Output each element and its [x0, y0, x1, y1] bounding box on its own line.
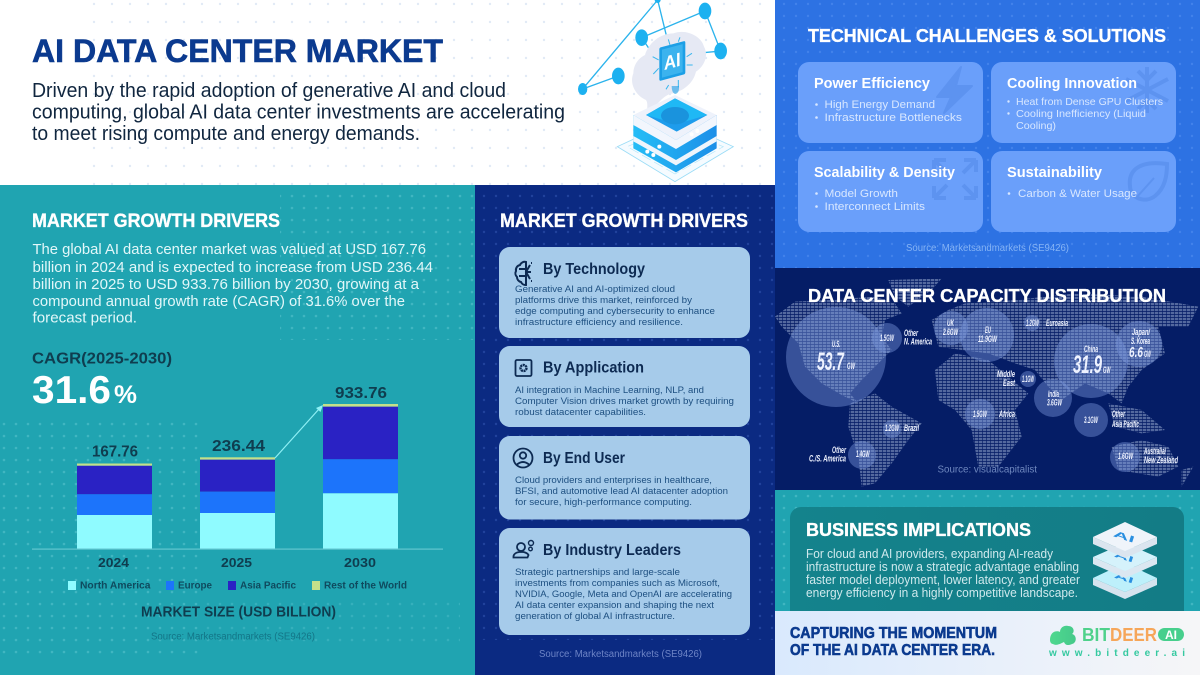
heading: DATA CENTER CAPACITY DISTRIBUTION: [808, 285, 1166, 306]
map labels: 53.7: [817, 348, 845, 376]
card: sustainability: [991, 151, 1176, 232]
card: scalability and density: Model Growth: [824, 188, 898, 200]
world dot map: [775, 278, 1198, 487]
cloud: [632, 32, 706, 113]
icon: bolt: [937, 67, 972, 113]
source: Source: visualcapitalist: [938, 464, 1037, 476]
card: by industry leaders: investments from companies such as Microsoft,: [515, 578, 720, 589]
stacked bar chart: [32, 385, 443, 570]
map labels: GW: [1144, 349, 1151, 359]
server: [633, 115, 717, 172]
arrow: [275, 405, 323, 458]
source: Source: Marketsandmarkets (SE9426): [906, 243, 1069, 254]
bar 2030: [323, 385, 398, 570]
legend: [68, 580, 407, 592]
closing statement: CAPTURING THE MOMENTUM: [790, 625, 997, 642]
description: [32, 242, 433, 326]
card: by application: robust datacenter capabilities.: [515, 407, 646, 418]
map labels: 6.6: [1129, 344, 1143, 361]
map labels: C./S. America: [809, 454, 846, 464]
card: by industry leaders: generation of global AI infrastructure.: [515, 611, 675, 622]
closing statement: [790, 625, 997, 659]
icon: AI cloud server illustration: AI: [664, 49, 681, 75]
card: by application: AI integration in Machine Learning, NLP, and: [515, 385, 704, 396]
logo: Bitdeer AI: [1048, 625, 1185, 659]
map labels: 11.9GW: [978, 334, 998, 345]
map labels: Other: [1112, 409, 1125, 419]
card: cooling innovation: Cooling Innovation: [1007, 76, 1137, 92]
card: by industry leaders: By Industry Leaders: [543, 542, 681, 559]
CAGR callout: %: [114, 381, 137, 409]
legend: North America: [80, 580, 151, 592]
axis title: MARKET SIZE (USD BILLION): [141, 604, 336, 620]
card: cooling innovation: Heat from Dense GPU Clusters: [1016, 97, 1163, 108]
bottom chip: AI: [1113, 571, 1135, 586]
icon: leader with gears: [514, 540, 534, 558]
map labels: GW: [1103, 365, 1111, 375]
bar 2025: 236.44: [212, 438, 265, 455]
map labels: China: [1084, 344, 1098, 354]
title: AI DATA CENTER MARKET: [32, 33, 443, 69]
panel: data center capacity map: [775, 268, 1200, 490]
map labels: Asia Pacific: [1111, 419, 1139, 429]
description: forecast period.: [32, 310, 137, 326]
logo: Bitdeer AI: AI: [1165, 630, 1177, 642]
card: by industry leaders: [499, 528, 750, 635]
logo: Bitdeer AI: DEER: [1110, 625, 1157, 645]
map labels: East: [1003, 378, 1016, 388]
inner card: [790, 507, 1184, 611]
map labels: India: [1048, 389, 1059, 399]
map labels: 1.2GW: [885, 423, 899, 433]
card: by application: By Application: [543, 360, 644, 376]
body text: faster model deployment, lower latency, and greater: [806, 573, 1080, 587]
subtitle: computing, global AI data center investments are accelerating: [32, 102, 565, 124]
card: cooling innovation: [991, 62, 1176, 143]
legend: Europe: [178, 580, 212, 592]
bar 2024: 167.76: [92, 444, 138, 460]
closing statement: OF THE AI DATA CENTER ERA.: [790, 642, 995, 659]
body text: infrastructure is now a strategic advantage enabling: [806, 560, 1079, 574]
panel: header: [0, 0, 775, 185]
card: sustainability: Sustainability: [1007, 165, 1102, 181]
card: by end user: Cloud providers and enterprises in healthcare,: [515, 475, 712, 486]
description: billion in 2025 to USD 933.76 billion by 2030, growing at a: [32, 277, 420, 293]
card: by technology: platforms drive this market, reinforced by: [515, 295, 692, 306]
card: by application: Computer Vision drives market growth by requiring: [515, 396, 734, 407]
map labels: 1.5GW: [880, 333, 894, 343]
card: by industry leaders: AI data center expansion and shaping the next: [515, 600, 714, 611]
CAGR callout: 31.6: [32, 369, 111, 412]
bar 2030: 933.76: [335, 385, 387, 402]
icon: user circle: [514, 448, 532, 468]
card: by technology: infrastructure efficiency and resilience.: [515, 317, 683, 328]
panel: market growth drivers teal: [0, 185, 475, 675]
bar 2030: 2030: [344, 556, 376, 570]
source: Source: Marketsandmarkets (SE9426): [539, 649, 702, 660]
card: cooling innovation: Cooling): [1016, 121, 1056, 132]
description: The global AI data center market was valued at USD 167.76: [32, 242, 426, 258]
card: by end user: for secure, high-performance computing.: [515, 497, 692, 508]
CAGR callout: [32, 350, 172, 412]
panel: footer: [775, 611, 1200, 675]
subtitle: Driven by the rapid adoption of generative AI and cloud: [32, 80, 506, 102]
card: by technology: By Technology: [543, 261, 645, 278]
map labels: Other: [832, 445, 846, 455]
card: power efficiency: High Energy Demand: [824, 99, 935, 111]
description: billion in 2024 and is expected to increase from USD 236.44: [32, 260, 433, 276]
map labels: 3.1GW: [1084, 415, 1098, 425]
middle chip: AI: [1113, 550, 1135, 565]
card: power efficiency: [798, 62, 983, 143]
map labels: New Zealand: [1144, 455, 1178, 465]
card: power efficiency: Power Efficiency: [814, 76, 930, 92]
source: Source: Marketsandmarkets (SE9426): [151, 632, 315, 642]
body text: energy efficiency in a highly competitive landscape.: [806, 586, 1078, 600]
card: by end user: By End User: [543, 450, 625, 467]
heading: TECHNICAL CHALLENGES & SOLUTIONS: [808, 25, 1166, 46]
map labels: Australia/: [1143, 446, 1167, 456]
heading: MARKET GROWTH DRIVERS: [32, 210, 280, 232]
logo: Bitdeer AI: BIT: [1082, 625, 1110, 645]
panel: business implications: [775, 490, 1200, 611]
bar 2025: 2025: [221, 556, 252, 570]
map labels: 1.5GW: [973, 409, 987, 419]
card: by technology: [499, 247, 750, 338]
panel: market growth drivers navy: [475, 185, 775, 675]
heading: BUSINESS IMPLICATIONS: [806, 520, 1031, 540]
card: by technology: Generative AI and AI-optimized cloud: [515, 284, 675, 295]
capacity bubbles: [786, 307, 1162, 472]
map labels: UK: [947, 318, 954, 328]
card: power efficiency: Infrastructure Bottlenecks: [824, 112, 963, 124]
map labels: 3.6GW: [1047, 398, 1062, 408]
icon: leaf: [1130, 163, 1167, 200]
legend: Rest of the World: [324, 580, 407, 592]
logo: Bitdeer AI: www.bitdeer.ai: [1048, 648, 1185, 659]
map labels: 1.1GW: [1022, 374, 1034, 384]
map labels: 1.4GW: [856, 449, 870, 459]
map labels: U.S.: [832, 339, 840, 349]
legend: Asia Pacific: [240, 580, 296, 592]
description: compound annual growth rate (CAGR) of 31.6% over the: [32, 294, 405, 310]
card: by technology: edge computing and cybersecurity to enhance: [515, 306, 715, 317]
map labels: EU: [985, 325, 991, 335]
icon: brain chip: [515, 262, 532, 285]
icon: AI cloud server illustration: [578, 0, 733, 182]
icon: expand arrows: [934, 160, 976, 198]
icon: gear in square: [516, 360, 532, 376]
body text: For cloud and AI providers, expanding AI-ready: [806, 547, 1054, 561]
CAGR callout: CAGR(2025-2030): [32, 350, 172, 368]
map labels: Middle: [997, 369, 1015, 379]
map labels: GW: [847, 361, 855, 371]
card: sustainability: Carbon & Water Usage: [1018, 188, 1137, 200]
card: by industry leaders: Strategic partnerships and large-scale: [515, 567, 680, 578]
card: scalability and density: [798, 151, 983, 232]
bar 2025: [200, 438, 275, 570]
icon: snowflake: [1126, 67, 1168, 113]
base plate: [617, 120, 733, 182]
subtitle: to meet rising compute and energy demands.: [32, 123, 420, 145]
map labels: Other: [904, 328, 918, 338]
map labels: S. Korea: [1131, 336, 1150, 346]
card: scalability and density: Interconnect Limits: [824, 201, 926, 213]
map labels: 1.6GW: [1118, 451, 1133, 461]
card: by end user: [499, 436, 750, 520]
card: scalability and density: Scalability & Density: [814, 165, 955, 181]
map labels: Japan/: [1132, 327, 1151, 337]
subtitle: [32, 80, 565, 145]
body text: [806, 547, 1080, 600]
bar 2024: 2024: [98, 556, 129, 570]
bar 2024: [77, 444, 152, 570]
map labels: 31.9: [1073, 351, 1102, 379]
map labels: Brazil: [904, 423, 919, 433]
map labels: 1.2GW: [1026, 318, 1039, 328]
map labels: 2.6GW: [942, 327, 958, 337]
card: by industry leaders: NVIDIA, Google, Meta and OpenAI are accelerating: [515, 589, 732, 600]
map labels: Africa: [998, 409, 1015, 419]
card: cooling innovation: Cooling Inefficiency (Liquid: [1016, 109, 1146, 120]
heading: MARKET GROWTH DRIVERS: [500, 210, 748, 232]
card: by application: [499, 346, 750, 427]
top chip: AI: [1112, 529, 1136, 545]
card: by end user: BFSI, and automotive lead AI datacenter adoption: [515, 486, 728, 497]
map labels: Euroasia: [1046, 318, 1068, 328]
icon: stacked AI chips: [1093, 522, 1157, 599]
panel: technical challenges: [775, 0, 1200, 268]
map labels: N. America: [904, 336, 932, 346]
map labels: [809, 318, 1178, 465]
